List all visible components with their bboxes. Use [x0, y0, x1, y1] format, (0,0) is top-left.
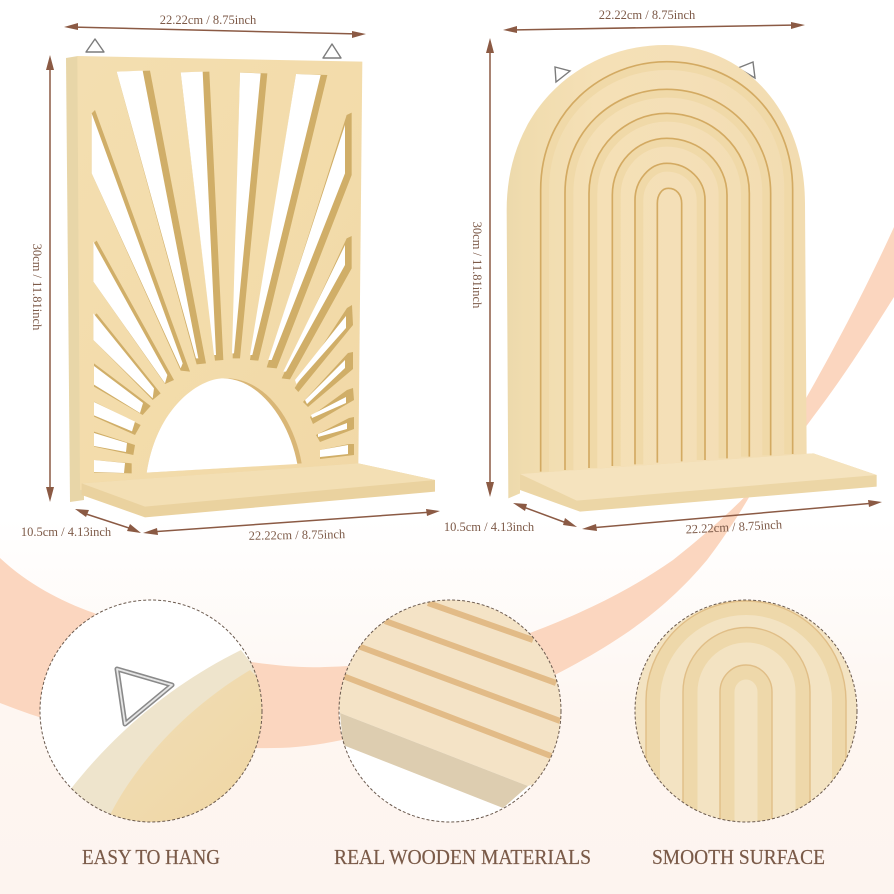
hook: right shelf right	[738, 62, 755, 78]
height label: 30cm / 11.81inch	[470, 222, 484, 309]
sunburst cutout panel	[77, 56, 435, 517]
ray bevels	[92, 71, 354, 473]
dimensions: left shelf	[21, 13, 440, 543]
bottom width label: 22.22cm / 8.75inch	[249, 527, 346, 543]
caption: real wooden materials: REAL WOODEN MATERIALS	[334, 845, 591, 869]
shelf board	[82, 463, 435, 517]
bottom width label: 22.22cm / 8.75inch	[685, 517, 783, 537]
ray openings	[92, 71, 348, 473]
depth arrow	[513, 503, 577, 527]
bottom width arrow	[143, 509, 440, 535]
depth arrow	[75, 509, 141, 533]
side panel	[66, 56, 84, 502]
wood edge band	[72, 650, 256, 822]
decorative peach ring	[0, 227, 894, 748]
top width label: 22.22cm / 8.75inch	[160, 13, 257, 27]
depth label: 10.5cm / 4.13inch	[444, 520, 535, 534]
board top	[339, 600, 561, 786]
height arrow	[486, 38, 494, 497]
grooves	[541, 62, 793, 472]
right product: arch shelf	[507, 45, 877, 512]
hook: right shelf left	[555, 67, 570, 82]
left product: sunburst shelf	[66, 39, 435, 517]
caption: easy to hang: EASY TO HANG	[82, 845, 220, 869]
detail circle: hook	[40, 600, 262, 822]
detail circle: smooth arches	[635, 600, 857, 830]
height arrow	[46, 55, 54, 502]
caption: smooth surface: SMOOTH SURFACE	[652, 845, 825, 869]
bottom width arrow	[582, 500, 882, 531]
top width arrow	[64, 23, 366, 38]
dimensions: right shelf	[444, 8, 882, 537]
front board	[77, 56, 362, 490]
depth label: 10.5cm / 4.13inch	[21, 525, 112, 539]
grooves	[343, 603, 560, 756]
arch board	[507, 45, 807, 498]
hook: left shelf left	[86, 39, 104, 52]
height label: 30cm / 11.81inch	[30, 244, 44, 331]
side face	[340, 713, 528, 808]
top width arrow	[503, 22, 805, 33]
soft groove shading	[545, 66, 788, 472]
top width label: 22.22cm / 8.75inch	[599, 8, 696, 22]
icon: triangular hanger	[117, 669, 172, 724]
wood face	[110, 670, 262, 822]
detail circle: wood grooves	[338, 600, 562, 822]
hook: left shelf right	[323, 44, 341, 58]
shelf board	[520, 453, 877, 512]
